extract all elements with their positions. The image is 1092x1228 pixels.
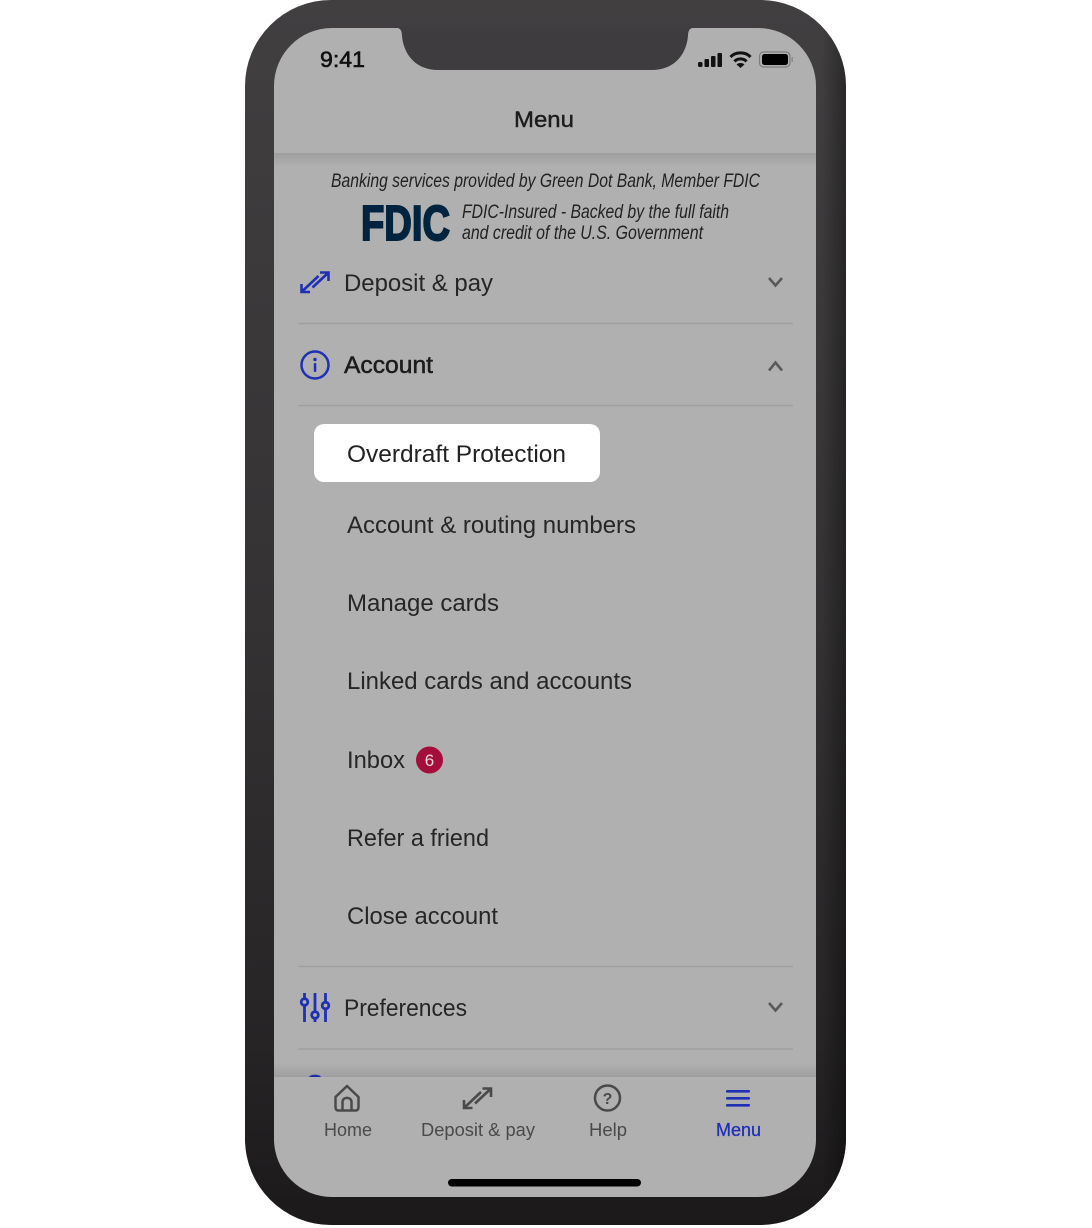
status bar — [320, 47, 793, 72]
nav item: help: Help — [589, 1120, 627, 1140]
signal icon — [698, 53, 722, 67]
bottom nav shadow — [274, 1063, 816, 1077]
screen background — [274, 28, 816, 1197]
label: Preferences — [344, 995, 467, 1022]
menu row: preferences — [301, 993, 782, 1022]
icon: deposit arrows — [302, 272, 328, 292]
nav item: deposit and pay — [421, 1088, 535, 1140]
account submenu: Manage cards — [347, 590, 499, 617]
account submenu: Refer a friend — [347, 825, 489, 852]
bottom navigation — [324, 1086, 761, 1140]
header title: Menu — [514, 107, 574, 132]
chevron — [769, 362, 782, 370]
FDIC statement — [462, 202, 729, 244]
nav item: help: ? — [603, 1091, 612, 1108]
account submenu: Account & routing numbers — [347, 512, 636, 539]
chevron — [769, 1003, 782, 1010]
battery icon — [760, 52, 793, 67]
chevron — [769, 278, 782, 286]
partially hidden menu icon — [309, 1075, 321, 1077]
banking disclosure: Banking services provided by Green Dot Bank, Member FDIC — [331, 171, 760, 192]
inbox badge — [416, 746, 443, 774]
menu row: deposit and pay — [302, 270, 782, 297]
nav item: menu: Menu — [716, 1120, 761, 1140]
nav item: menu — [716, 1090, 761, 1140]
FDIC logo: FDIC — [361, 197, 450, 251]
label: Account — [344, 352, 433, 379]
account submenu: Close account — [347, 903, 498, 930]
highlighted item: overdraft protection — [314, 424, 600, 482]
menu row: account — [302, 352, 782, 379]
clock: 9:41 — [320, 47, 365, 72]
header shadow — [274, 153, 816, 167]
highlighted item: overdraft protection: Overdraft Protection — [347, 441, 566, 468]
notch — [396, 27, 694, 70]
phone frame — [245, 0, 846, 1225]
account submenu: Inbox — [347, 747, 405, 774]
account submenu — [347, 512, 636, 930]
nav item: home — [324, 1086, 372, 1140]
FDIC statement: and credit of the U.S. Government — [462, 223, 704, 244]
label: Deposit & pay — [344, 270, 493, 297]
nav item: home: Home — [324, 1120, 372, 1140]
FDIC statement: FDIC-Insured - Backed by the full faith — [462, 202, 729, 223]
icon: sliders — [301, 993, 329, 1022]
home indicator — [448, 1179, 641, 1186]
wifi icon — [730, 53, 750, 68]
inbox badge: 6 — [425, 751, 434, 770]
nav item: help — [589, 1086, 627, 1140]
nav item: deposit and pay: Deposit & pay — [421, 1120, 535, 1140]
icon: info — [302, 352, 328, 378]
account submenu: Linked cards and accounts — [347, 668, 632, 695]
